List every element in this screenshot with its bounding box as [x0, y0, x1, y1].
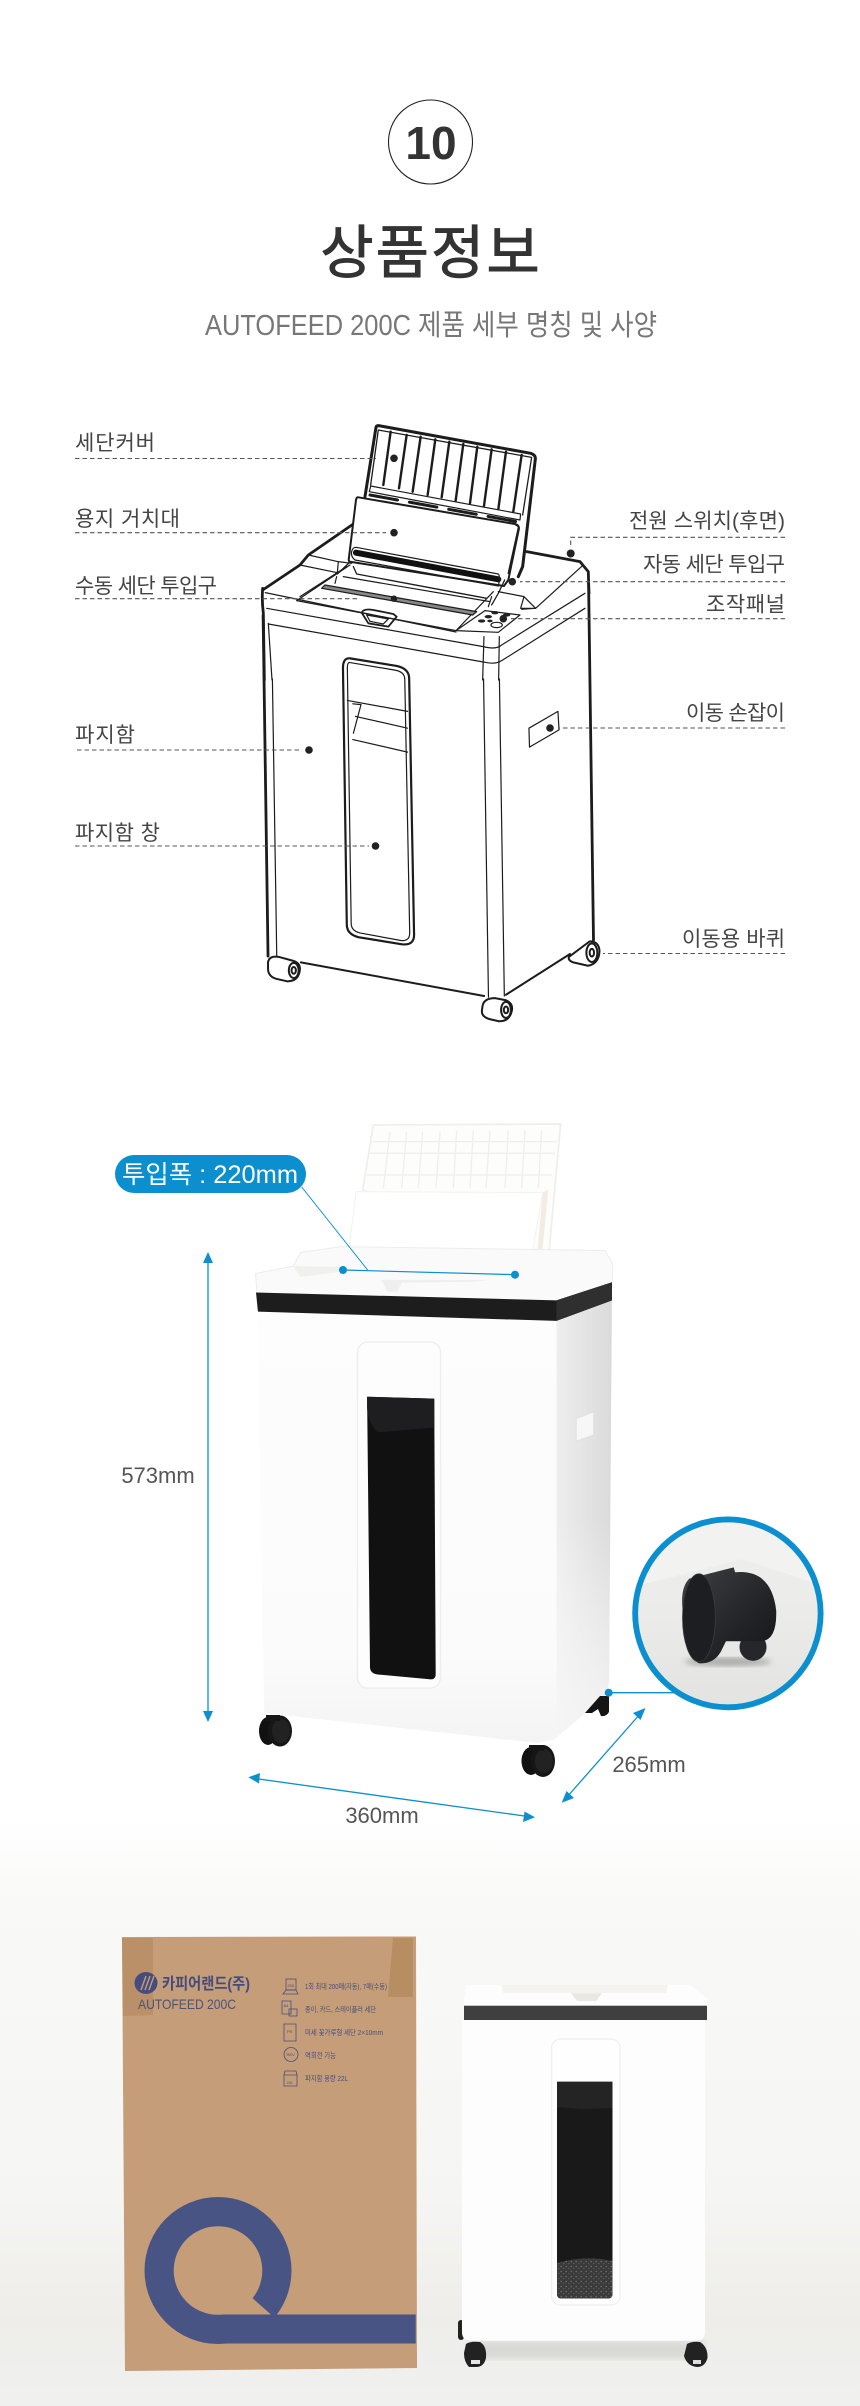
label: 이동 손잡이	[546, 702, 785, 732]
paper tray	[349, 497, 519, 586]
shred cover	[365, 426, 535, 577]
big blue Q graphic	[144, 2197, 416, 2344]
casters on photo	[259, 1696, 609, 1777]
top with cover, tray, and control panel	[262, 426, 589, 680]
label: 파지함 창	[75, 822, 379, 850]
side handle	[576, 1412, 594, 1441]
header	[205, 100, 657, 342]
part labels, left	[75, 432, 398, 850]
spec list: 1회 최대 200매(자동), 7매(수동)	[305, 1981, 387, 1991]
dark window	[367, 1397, 436, 1679]
shredder body	[256, 1247, 613, 1743]
label: 조작패널: 조작패널	[706, 594, 785, 617]
dimension arrows	[203, 1252, 680, 1822]
label: 용지 거치대	[75, 508, 398, 536]
lid	[464, 1985, 707, 2006]
section number badge	[388, 100, 472, 184]
subtitle: AUTOFEED 200C 제품 세부 명칭 및 사양	[205, 310, 657, 342]
window bezel	[552, 2039, 620, 2305]
label: 수동 세단 투입구: 수동 세단 투입구	[75, 575, 217, 598]
brand logo	[134, 1972, 250, 2012]
dark band	[464, 2006, 707, 2020]
label: 전원 스위치(후면): 전원 스위치(후면)	[629, 510, 785, 533]
label: 용지 거치대: 용지 거치대	[75, 508, 180, 531]
width dimension: 360mm	[345, 1803, 419, 1828]
shredder photo with dimensions	[115, 1124, 824, 1828]
feed width indicator	[302, 1187, 519, 1279]
part labels, right	[500, 510, 785, 954]
title: 상품정보	[320, 221, 542, 286]
feed width pill: 투입폭 : 220mm	[122, 1161, 298, 1189]
section number badge: 10	[405, 117, 457, 169]
wheel close-up inset	[631, 1518, 824, 1713]
paper cover and tray	[347, 1124, 561, 1263]
feed platform	[297, 565, 520, 632]
window bezel	[357, 1342, 441, 1688]
spec list: A4	[284, 2003, 289, 2008]
brand logo: AUTOFEED 200C	[138, 1996, 236, 2012]
cardboard box	[122, 1936, 417, 2371]
shredder body outline	[263, 582, 600, 1021]
spec list: 22L	[286, 2080, 294, 2085]
control panel buttons	[478, 611, 510, 623]
label: 자동 세단 투입구: 자동 세단 투입구	[643, 554, 785, 577]
depth dimension: 265mm	[612, 1752, 686, 1777]
page background	[0, 1820, 860, 2406]
line drawing of shredder	[262, 426, 600, 1021]
front tab	[362, 610, 397, 627]
lid	[256, 1247, 613, 1303]
spec list: REV	[286, 2052, 295, 2057]
spec list: 역회전 기능	[305, 2050, 336, 2060]
bottom product photo	[122, 1936, 708, 2371]
height dimension: 573mm	[121, 1463, 195, 1488]
label: 파지함	[75, 724, 313, 754]
spec list: 파지함 용량 22L	[305, 2074, 348, 2083]
label: 이동용 바퀴: 이동용 바퀴	[682, 928, 785, 951]
carry handle	[529, 711, 559, 747]
window	[343, 658, 414, 944]
spec list: 200	[288, 1983, 295, 1988]
label: 이동 손잡이: 이동 손잡이	[686, 702, 785, 725]
casters	[464, 2342, 708, 2367]
label: 전원 스위치(후면)	[567, 510, 785, 558]
label: 자동 세단 투입구	[508, 554, 785, 586]
spec list: PS	[287, 2029, 293, 2034]
lid	[263, 524, 353, 590]
label: 파지함 창: 파지함 창	[75, 822, 160, 845]
black band	[256, 1282, 612, 1321]
spec list: 종이, 카드, 스테이플러 세단	[305, 2004, 376, 2014]
window	[557, 2082, 612, 2298]
rear wheel	[740, 1640, 767, 1661]
label: 세단커버	[75, 432, 398, 462]
floor shadow	[468, 2341, 704, 2359]
label: 파지함: 파지함	[75, 724, 135, 747]
white shredder front view	[458, 1985, 708, 2367]
brand logo: 카피어랜드(주)	[162, 1975, 250, 1993]
spec list	[282, 1979, 387, 2086]
label: 세단커버: 세단커버	[75, 432, 155, 455]
packing tape	[122, 1938, 153, 2016]
body	[462, 2020, 705, 2341]
back caster	[458, 2320, 464, 2340]
caster	[682, 1567, 776, 1663]
label: 수동 세단 투입구	[75, 575, 397, 602]
feed width pill	[115, 1155, 306, 1193]
wheels	[268, 941, 600, 1021]
label: 조작패널	[500, 594, 785, 622]
spec list: 미세 꽃가루형 세단 2×10mm	[305, 2027, 383, 2037]
